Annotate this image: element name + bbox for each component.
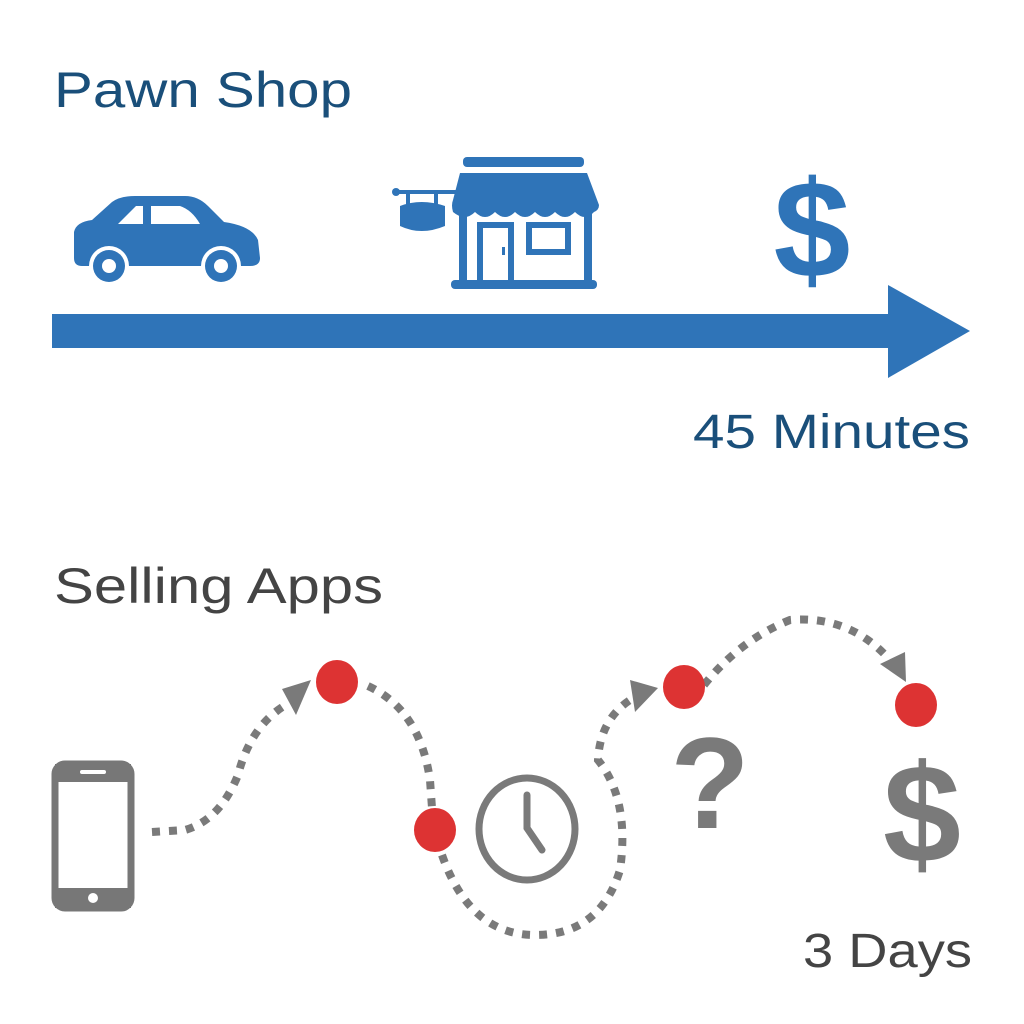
- arrow: timeline: [52, 285, 970, 378]
- label: 45 Minutes: 45 Minutes: [693, 406, 970, 459]
- icon: dollar blue: $: [774, 153, 850, 307]
- icon: car: [74, 196, 260, 286]
- icon: question mark: ?: [670, 710, 750, 856]
- dotted path: [152, 620, 890, 935]
- icon: phone: [55, 764, 131, 908]
- label: 3 Days: 3 Days: [803, 925, 972, 978]
- icon: dollar grey: $: [883, 735, 961, 892]
- icon: shop: [392, 157, 599, 289]
- arrowheads: [282, 652, 906, 715]
- red dots: [316, 660, 937, 852]
- icon: clock: [479, 778, 575, 880]
- title: Pawn Shop: Pawn Shop: [54, 62, 352, 118]
- title: Selling Apps: Selling Apps: [54, 558, 383, 614]
